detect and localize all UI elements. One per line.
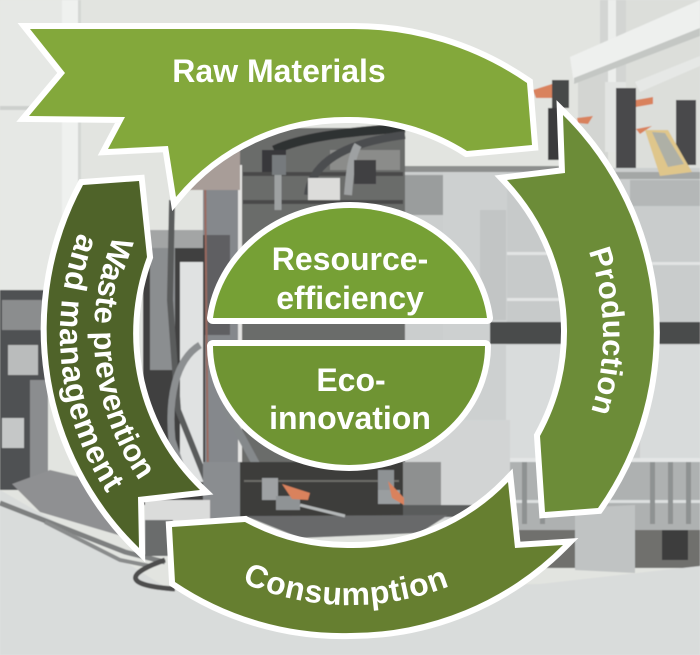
arrow: Consumption xyxy=(166,468,578,640)
left machinery xyxy=(0,290,46,490)
label: Waste prevention: Waste prevention xyxy=(88,240,151,480)
centre panel: Resource-efficiency xyxy=(213,208,487,318)
label: Eco-innovation: Eco- xyxy=(316,362,386,398)
arrow: Raw Materials xyxy=(29,29,532,197)
arrow: Production xyxy=(494,100,660,518)
label: Production: Production xyxy=(589,246,625,414)
label: Resource-efficiency: efficiency xyxy=(276,280,424,316)
label: and management: and management xyxy=(59,234,123,493)
label: Raw Materials: Raw Materials xyxy=(172,53,386,89)
label: Resource-efficiency: Resource- xyxy=(272,241,428,277)
valves and meter xyxy=(552,80,569,108)
bottom band of machine xyxy=(203,462,245,522)
label: Consumption: Consumption xyxy=(246,565,448,611)
centre panel: Eco-innovation xyxy=(213,346,485,465)
central machinery xyxy=(240,128,405,468)
label: Eco-innovation: innovation xyxy=(269,400,431,436)
floor xyxy=(0,490,700,655)
tanks xyxy=(388,168,700,468)
arrow: Waste prevention and management xyxy=(40,174,214,562)
